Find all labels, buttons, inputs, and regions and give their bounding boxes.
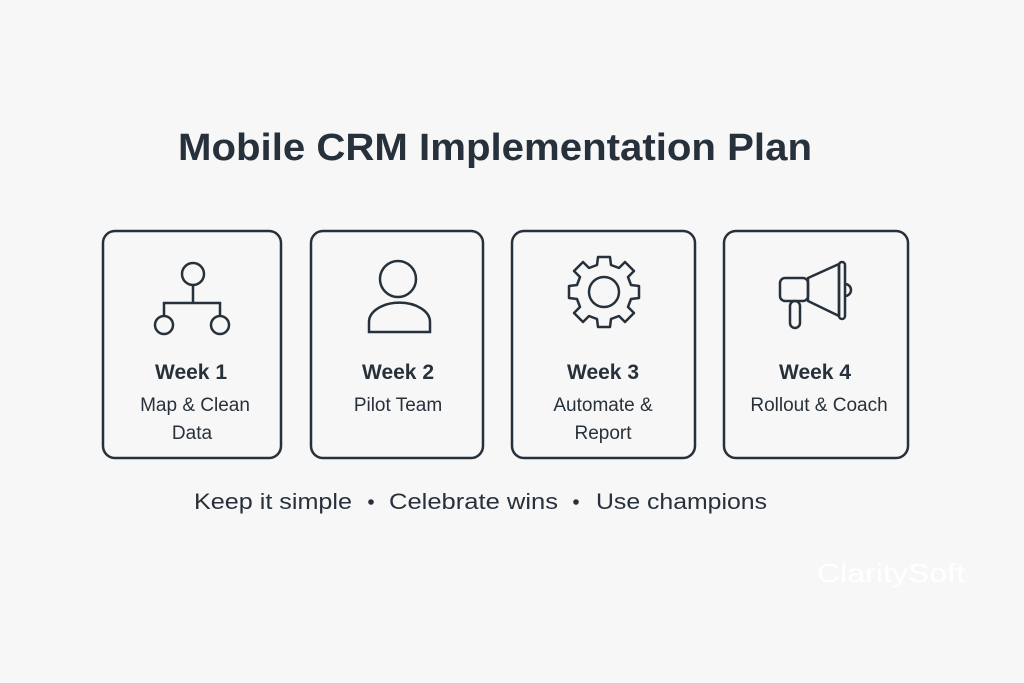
tagline: Keep it simple xyxy=(194,489,352,514)
tagline: Use champions xyxy=(596,489,767,514)
panel: week 2: Pilot Team xyxy=(354,395,442,416)
panel: week 3: Week 3 xyxy=(567,361,639,384)
icon: megaphone xyxy=(780,262,851,328)
panel: week 4: Week 4 xyxy=(779,361,851,384)
panel: week 4 xyxy=(724,231,908,458)
panel: week 1: Week 1 xyxy=(155,361,227,384)
panel: week 3: Report xyxy=(574,423,632,444)
panel: week 1: Map & Clean xyxy=(140,395,250,416)
panel: week 4: Rollout & Coach xyxy=(750,395,888,416)
panel: week 2 xyxy=(311,231,483,458)
panel: week 3: Automate & xyxy=(553,395,653,416)
icon: person xyxy=(369,261,430,332)
icon: gear xyxy=(569,257,639,327)
panel: week 1: Data xyxy=(172,423,212,444)
watermark: ClaritySoft xyxy=(817,558,966,588)
panel: week 1 xyxy=(103,231,281,458)
tagline xyxy=(194,489,767,514)
panel: week 3 xyxy=(512,231,695,458)
icon: hierarchy xyxy=(155,263,229,334)
panel: week 2: Week 2 xyxy=(362,361,434,384)
tagline: Celebrate wins xyxy=(389,489,558,514)
title: Mobile CRM Implementation Plan xyxy=(178,127,812,169)
